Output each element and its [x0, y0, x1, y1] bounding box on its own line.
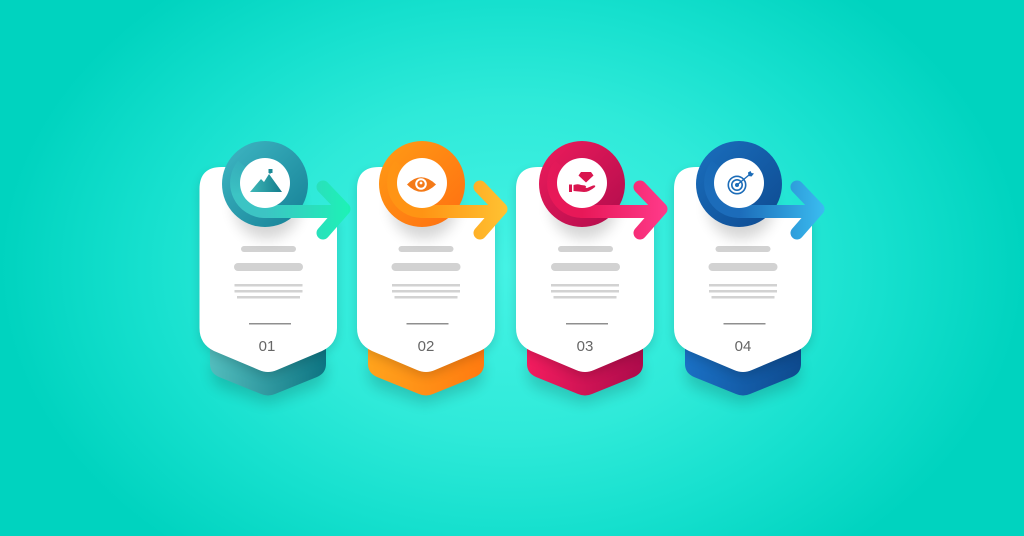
text placeholder bars: [708, 246, 778, 298]
divider: [724, 323, 766, 324]
arrow: [265, 187, 344, 233]
arrow: [422, 187, 501, 233]
card body: [357, 167, 495, 372]
back tab: [368, 340, 484, 396]
icon disc: [379, 141, 465, 227]
text placeholder bars: [392, 246, 460, 298]
text placeholder bars: [551, 246, 620, 298]
step number: 04: [735, 338, 751, 355]
back tab: [685, 340, 801, 396]
back tab: [527, 340, 643, 396]
icon circle: [240, 158, 290, 208]
step number: 02: [418, 338, 434, 355]
panel: step 03: [516, 141, 661, 403]
curl arc: [394, 165, 422, 212]
back tab: [210, 340, 326, 396]
card body: [674, 167, 812, 372]
panel: step 04: [674, 141, 818, 403]
icon disc: [539, 141, 625, 227]
arrow: [582, 187, 661, 233]
arrow: [739, 187, 818, 233]
card body: [516, 167, 654, 372]
curl arc: [237, 165, 265, 212]
card body: [200, 167, 337, 372]
icon circle: [714, 158, 764, 208]
text placeholder bars: [234, 246, 303, 298]
icon disc: [696, 141, 782, 227]
panel: step 02: [357, 141, 501, 403]
curl arc: [711, 165, 739, 212]
divider: [249, 323, 291, 324]
icon: mountain: [250, 169, 282, 192]
icon disc: [222, 141, 308, 227]
step number: 03: [577, 338, 593, 355]
icon circle: [397, 158, 447, 208]
divider: [566, 323, 608, 324]
divider: [406, 323, 448, 324]
icon: eye: [407, 177, 436, 192]
curl arc: [554, 165, 582, 212]
icon: target: [728, 171, 754, 194]
panel: step 01: [200, 141, 344, 403]
step number: 01: [259, 338, 275, 355]
icon circle: [557, 158, 607, 208]
icon: hand holding diamond: [569, 172, 595, 192]
